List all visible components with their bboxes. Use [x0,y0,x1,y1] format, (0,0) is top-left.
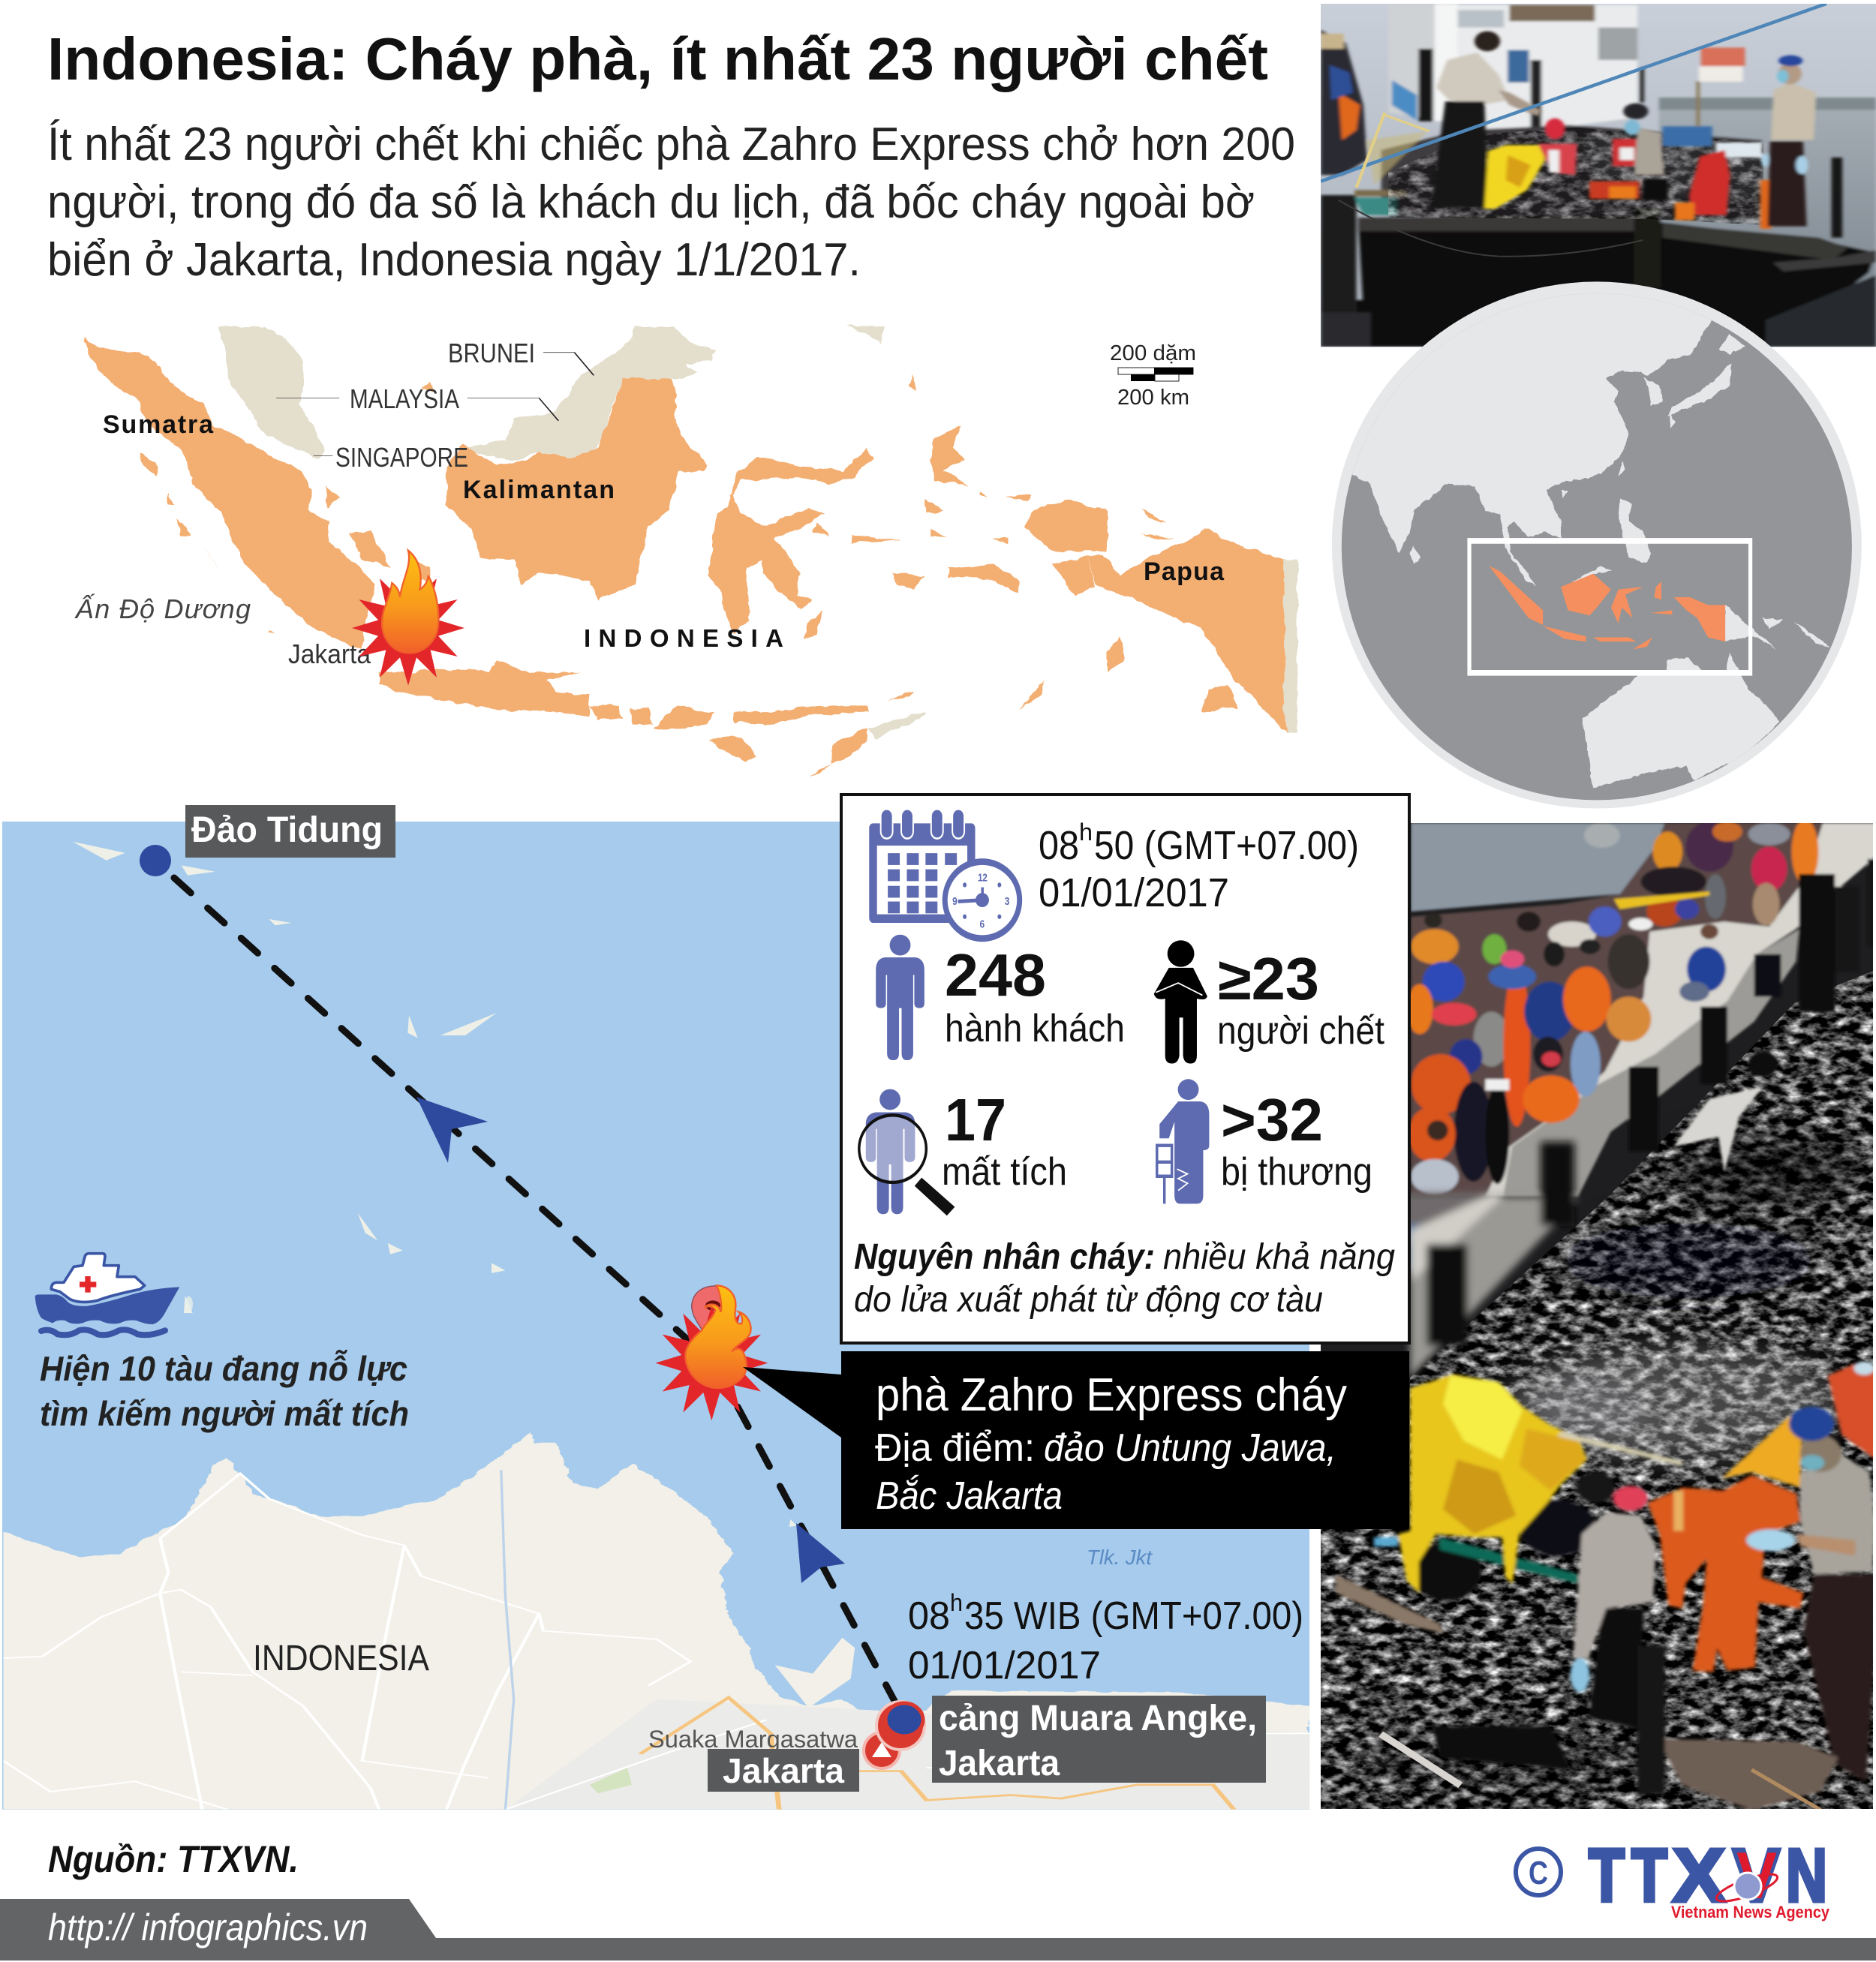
logo: TTXVN: X [1673,1834,1725,1918]
small islands [73,842,797,1527]
stat: deaths: người chết [1217,1009,1384,1053]
footer bar: http:// infographics.vn [48,1906,368,1948]
stat: injured [1221,1086,1372,1194]
label: Muara Angke port [932,1696,1266,1783]
marker: Muara Angke port [876,1702,924,1750]
lower pier wall and crowd [1403,1142,1578,1378]
land: Indonesian islands [84,337,1288,777]
text: rescue ships note [40,1349,409,1433]
map label: Malaysia: MALAYSIA [350,383,459,414]
arrow: route direction north [796,1523,845,1583]
stat: passengers: hành khách [945,1007,1125,1050]
stat: deaths: ≥23 [1218,945,1319,1012]
text: cause of fire: do lửa xuất phát từ động cơ tàu [854,1280,1323,1320]
stat: injured: >32 [1221,1086,1323,1153]
logo: TTXVN: T [1631,1834,1667,1918]
title: Indonesia: Cháy phà, ít nhất 23 người chết [47,26,1268,92]
text: departure time: 08 [908,1594,950,1638]
stat: missing: 17 [945,1086,1006,1153]
route: dashed line [174,878,894,1701]
stat: missing [942,1086,1067,1194]
globe locator map [1332,281,1862,809]
stat: injured: bị thương [1221,1150,1372,1194]
map label: Sumatra: Sumatra [103,410,214,439]
text: departure time: 01/01/2017 [908,1644,1101,1687]
text: rescue ships note: Hiện 10 tàu đang nỗ lực [40,1349,407,1388]
text: cause of fire: Nguyên nhân cháy: [854,1237,1155,1277]
icon: calendar and clock: 6 [979,918,985,930]
callout: fire location: Bắc Jakarta [876,1474,1063,1518]
land and roads [0,1432,1309,1816]
callout: fire location: phà Zahro Express cháy [876,1369,1347,1421]
logo: TTXVN [1516,1834,1830,1921]
intro paragraph [47,119,1295,286]
label: Tlk. Jkt: Tlk. Jkt [1087,1546,1153,1569]
text: fire time: h [1079,819,1093,846]
icon: calendar and clock: 9 [952,895,958,907]
photo: rescuers on burnt wreck [1321,819,1876,1810]
map label: Jakarta: Jakarta [288,638,371,669]
icon: injured person on crutch [1157,1079,1209,1203]
icon: rescue ship [35,1254,193,1335]
label: Muara Angke port: cảng Muara Angke, [939,1699,1257,1738]
text: fire time: 08 [1039,823,1079,868]
map: Indonesia regional map [74,327,1297,777]
arrow: route direction north-west [416,1097,488,1163]
intro paragraph: biển ở Jakarta, Indonesia ngày 1/1/2017. [47,234,861,286]
text: departure time [908,1589,1303,1687]
scale bar [1110,341,1196,410]
text: departure time: 35 WIB (GMT+07.00) [964,1594,1303,1638]
footer bar [0,1899,1876,1960]
callout: fire location: đảo Untung Jawa, [1044,1426,1336,1470]
logo: TTXVN: C [1529,1855,1548,1891]
text: cause of fire [854,1237,1395,1320]
icon: missing person under magnifier [859,1089,952,1214]
logo: TTXVN: V [1733,1834,1780,1918]
label: Suaka Margasatwa: Suaka Margasatwa [648,1726,858,1753]
lower scene: recovery workers [1336,1361,1876,1810]
icon: fire burst at accident site [655,1285,768,1420]
scale bar: 200 dặm [1110,341,1196,365]
map label: Papua: Papua [1144,557,1225,586]
intro paragraph: Ít nhất 23 người chết khi chiếc phà Zahro Express chở hơn 200 [47,119,1295,170]
map label: Indian Ocean: Ấn Độ Dương [74,593,251,624]
land: neighbouring countries [219,327,1297,738]
debris texture on deck [1388,128,1763,225]
stat: passengers [945,942,1125,1050]
map label: Brunei: BRUNEI [448,338,535,368]
stat: missing: mất tích [942,1150,1067,1194]
photo: burnt ferry at the dock [1321,4,1876,347]
upper scene: pier and crowd [1406,819,1876,1197]
logo: TTXVN: Vietnam News Agency [1671,1903,1830,1921]
text: departure time: h [950,1589,963,1616]
logo: TTXVN: T [1589,1834,1625,1918]
callout lines for map labels [276,353,594,456]
logo: TTXVN: N [1786,1834,1827,1918]
panel: incident facts [841,795,1409,1343]
intro paragraph: người, trong đó đa số là khách du lịch, đã bốc cháy ngoài bờ [47,176,1255,228]
label: Jakarta: Jakarta [723,1751,844,1790]
callout: fire location: Địa điểm: [875,1426,1035,1470]
stat: passengers: 248 [945,942,1046,1008]
sea background [2,822,1309,1810]
map label: Indonesia: INDONESIA [584,624,783,652]
source: Nguồn: TTXVN. [48,1838,299,1880]
marker: Tidung island dot [140,845,171,876]
icon: calendar and clock: 12 [978,871,988,884]
label: Muara Angke port: Jakarta [939,1744,1060,1783]
marker: Jakarta red pin [864,1732,900,1768]
text: rescue ships note: tìm kiếm người mất tích [40,1394,409,1433]
icon: fire burst at Jakarta [352,551,464,686]
scale bar: 200 km [1117,386,1189,410]
text: fire time: 50 (GMT+07.00) [1094,823,1359,868]
map label: Singapore: SINGAPORE [335,442,468,473]
burnt debris light and dark patches [1351,1133,1861,1801]
icon: calendar and clock [869,809,1020,939]
map label: Kalimantan: Kalimantan [463,476,615,504]
icon: calendar and clock: 3 [1005,895,1010,907]
logo: TTXVN: V [1736,1838,1777,1912]
burnt debris texture [1321,968,1873,1809]
text: fire time [1039,819,1359,915]
text: fire time: 01/01/2017 [1039,870,1229,915]
icon: passenger [876,935,924,1060]
text: cause of fire: nhiều khả năng [1163,1237,1395,1277]
label: Tidung island: Đảo Tidung [191,810,383,850]
label: Indonesia on route map: INDONESIA [253,1639,429,1678]
Indonesia highlight on globe [1489,566,1725,650]
locator frame [1469,541,1751,673]
stat: deaths [1217,945,1384,1053]
callout: fire location [743,1351,1409,1529]
icon: deceased person [1154,940,1207,1063]
route map panel [0,805,1309,1816]
